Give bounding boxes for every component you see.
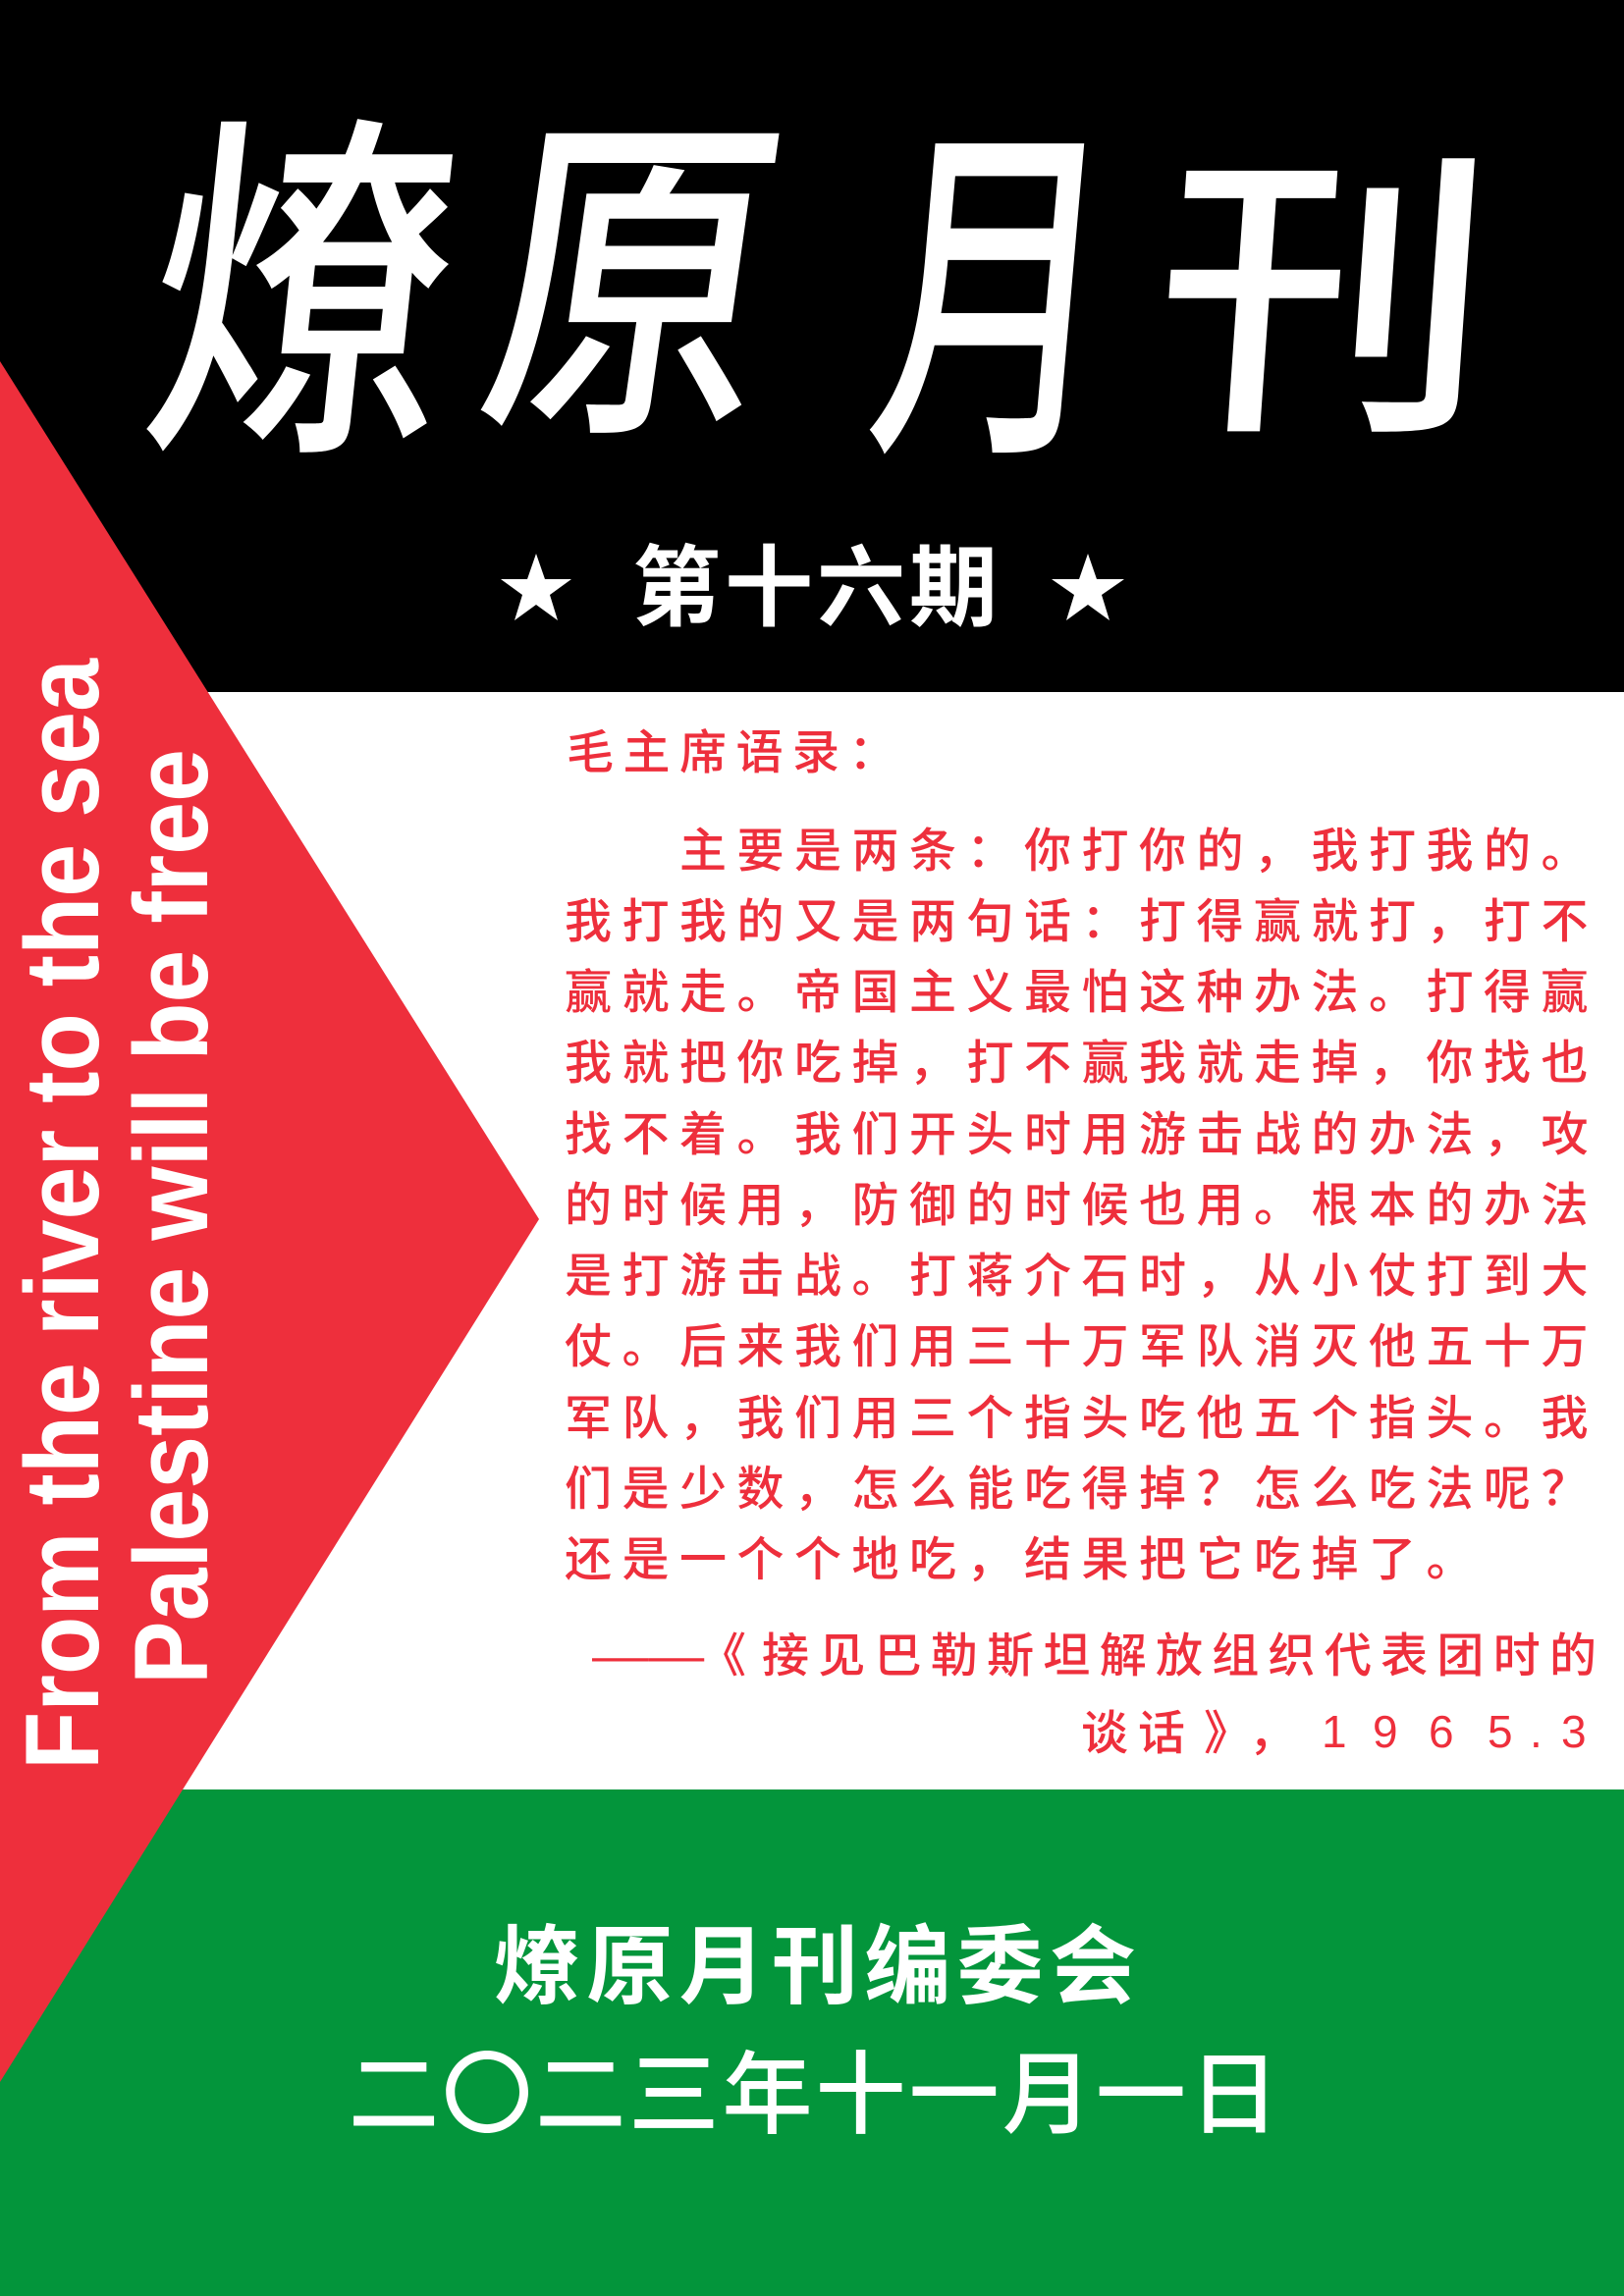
quotation body: 找不着。我们开头时用游击战的办法，攻 bbox=[565, 1109, 1598, 1161]
icon: right star bbox=[1052, 554, 1124, 620]
quotation source: 3 bbox=[1561, 1706, 1587, 1757]
publication date: 二〇二三年十一月一日 bbox=[349, 2046, 1279, 2146]
red triangle bbox=[0, 361, 539, 2082]
title character 2: 原 bbox=[462, 96, 799, 478]
quotation source: 9 bbox=[1373, 1706, 1398, 1757]
quotation body: 我打我的又是两句话：打得赢就打，打不 bbox=[565, 896, 1598, 948]
quotation source: 》 bbox=[1204, 1708, 1251, 1760]
black flag band bbox=[0, 0, 1624, 692]
quotation source: 1 bbox=[1322, 1706, 1347, 1757]
title bbox=[130, 96, 1503, 500]
quotation source: . bbox=[1530, 1706, 1543, 1757]
quotation body: 还是一个个地吃，结果把它吃掉了。 bbox=[565, 1534, 1484, 1586]
quotation source: 《 bbox=[699, 1630, 746, 1682]
title character 4: 刊 bbox=[1144, 134, 1503, 470]
quotation source: 接见巴勒斯坦解放组织代表团时的 bbox=[762, 1630, 1597, 1682]
editorial board: 燎原月刊编委会 bbox=[494, 1918, 1136, 2015]
quotation source: 6 bbox=[1429, 1706, 1454, 1757]
quotation source bbox=[592, 1629, 1597, 1760]
slogan rotated text bbox=[3, 658, 230, 1770]
quotation body: 赢就走。帝国主义最怕这种办法。打得赢 bbox=[565, 967, 1598, 1019]
quotation body: 们是少数，怎么能吃得掉？怎么吃法呢？ bbox=[565, 1464, 1598, 1516]
slogan line 1: From the river to the sea bbox=[3, 658, 121, 1770]
title character 3: 月 bbox=[857, 105, 1127, 500]
quotation body: 是打游击战。打蒋介石时，从小仗打到大 bbox=[565, 1251, 1598, 1303]
quotation source: ， bbox=[1249, 1708, 1296, 1760]
quotation body: 军队，我们用三个指头吃他五个指头。我 bbox=[565, 1393, 1598, 1445]
quotation body: 仗。后来我们用三十万军队消灭他五十万 bbox=[565, 1321, 1598, 1373]
green flag band bbox=[0, 1789, 1624, 2296]
quotation source: —— bbox=[592, 1629, 704, 1682]
issue text: 第十六期 bbox=[632, 540, 998, 638]
quotation heading: 毛主席语录： bbox=[567, 727, 905, 779]
title character 1: 燎 bbox=[130, 98, 478, 499]
quotation body: 的时候用，防御的时候也用。根本的办法 bbox=[565, 1180, 1598, 1232]
white flag band bbox=[0, 692, 1624, 1790]
quotation source: 5 bbox=[1488, 1706, 1513, 1757]
quotation body: 主要是两条：你打你的，我打我的。 bbox=[679, 826, 1598, 878]
slogan line 2: Palestine will be free bbox=[112, 749, 230, 1684]
quotation body bbox=[565, 826, 1598, 1586]
quotation source: 谈话 bbox=[1081, 1708, 1185, 1760]
issue number bbox=[501, 540, 1124, 638]
quotation body: 我就把你吃掉，打不赢我就走掉，你找也 bbox=[565, 1038, 1598, 1090]
icon: left star bbox=[501, 554, 571, 620]
